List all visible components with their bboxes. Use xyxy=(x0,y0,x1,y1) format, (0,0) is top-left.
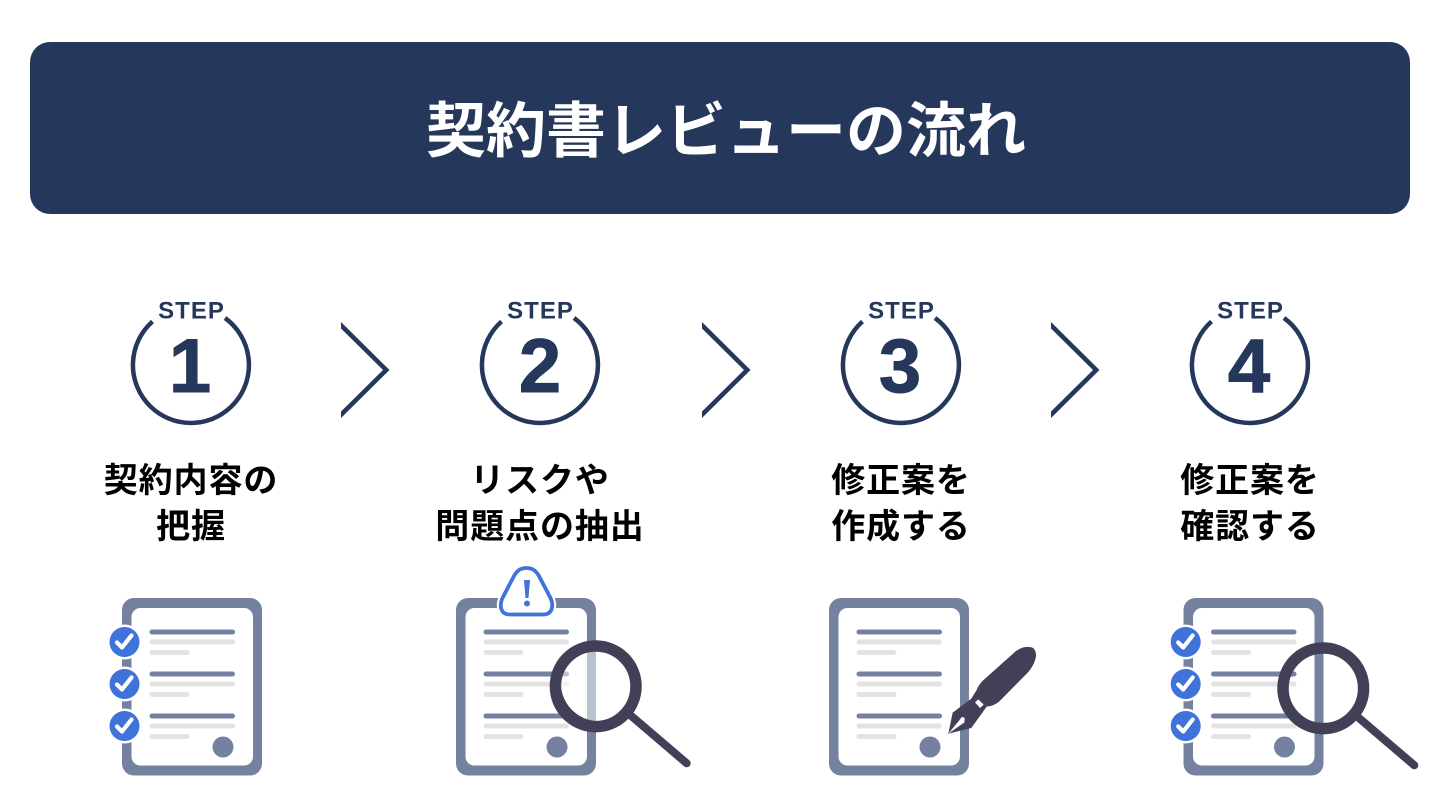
title: 契約書レビューの流れ xyxy=(426,98,1026,165)
step 4 badge: 4 xyxy=(1228,324,1270,409)
arrow 1 xyxy=(341,322,390,418)
step 2 label: 問題点の抽出 xyxy=(435,508,645,546)
step 2 badge xyxy=(482,298,598,423)
step 2 label: リスクや xyxy=(470,462,610,500)
step 2 badge: STEP xyxy=(507,298,574,324)
step 3 badge: 3 xyxy=(879,324,921,409)
step 1 label: 把握 xyxy=(156,508,226,546)
arrow 2 xyxy=(702,322,750,418)
step 3 badge: STEP xyxy=(868,298,935,324)
step 1 badge xyxy=(133,298,249,423)
icon: document with checks and magnifier xyxy=(1168,598,1414,776)
step 4 badge: STEP xyxy=(1217,298,1284,324)
step 3 badge xyxy=(843,298,959,423)
icon: document with checks xyxy=(107,598,262,776)
icon: document with fountain pen xyxy=(829,598,1036,776)
step 2 badge: 2 xyxy=(519,324,561,409)
step 3 label: 作成する xyxy=(831,508,971,546)
step 3 label: 修正案を xyxy=(831,462,971,500)
step 1 label: 契約内容の xyxy=(104,462,278,500)
arrow 3 xyxy=(1051,322,1100,418)
step 4 label: 修正案を xyxy=(1180,462,1320,500)
icon: document with warning and magnifier xyxy=(456,568,687,776)
step 1 badge: STEP xyxy=(158,298,225,324)
title banner xyxy=(30,42,1410,214)
step 4 badge xyxy=(1192,298,1308,423)
step 4 label: 確認する xyxy=(1180,508,1320,546)
step 1 badge: 1 xyxy=(169,324,211,409)
